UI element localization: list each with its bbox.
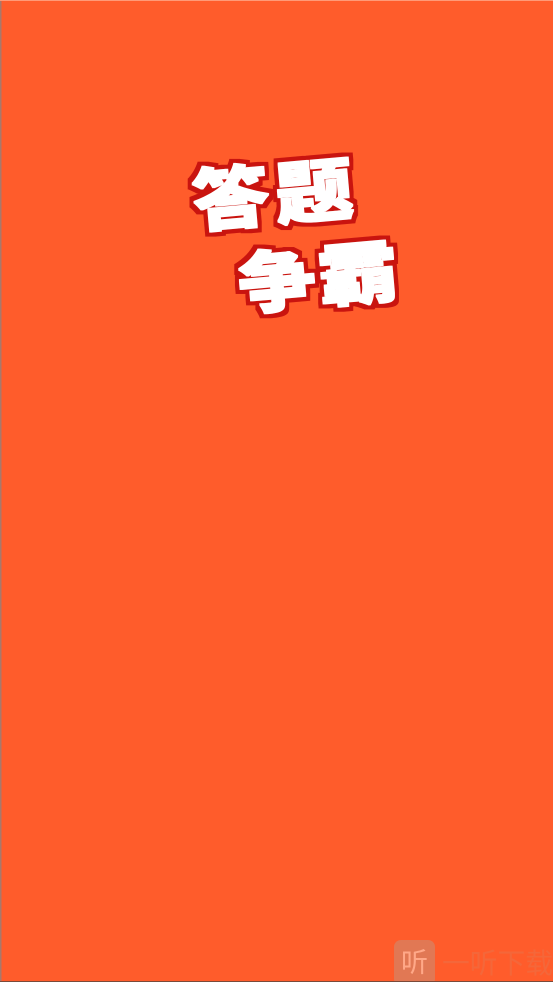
title character: 争: 争 <box>235 242 319 324</box>
watermark <box>394 940 553 982</box>
title character: 题: 题 <box>272 152 356 234</box>
title character: 答: 答 <box>190 159 272 241</box>
left edge line <box>0 0 2 982</box>
title: 答题争霸 <box>190 152 401 324</box>
top edge line <box>0 0 553 1</box>
watermark icon: 听 <box>401 948 428 978</box>
watermark text: 一听下载 <box>442 948 553 979</box>
watermark icon <box>394 940 435 982</box>
bottom edge line <box>0 981 553 982</box>
title character: 霸: 霸 <box>315 234 401 316</box>
